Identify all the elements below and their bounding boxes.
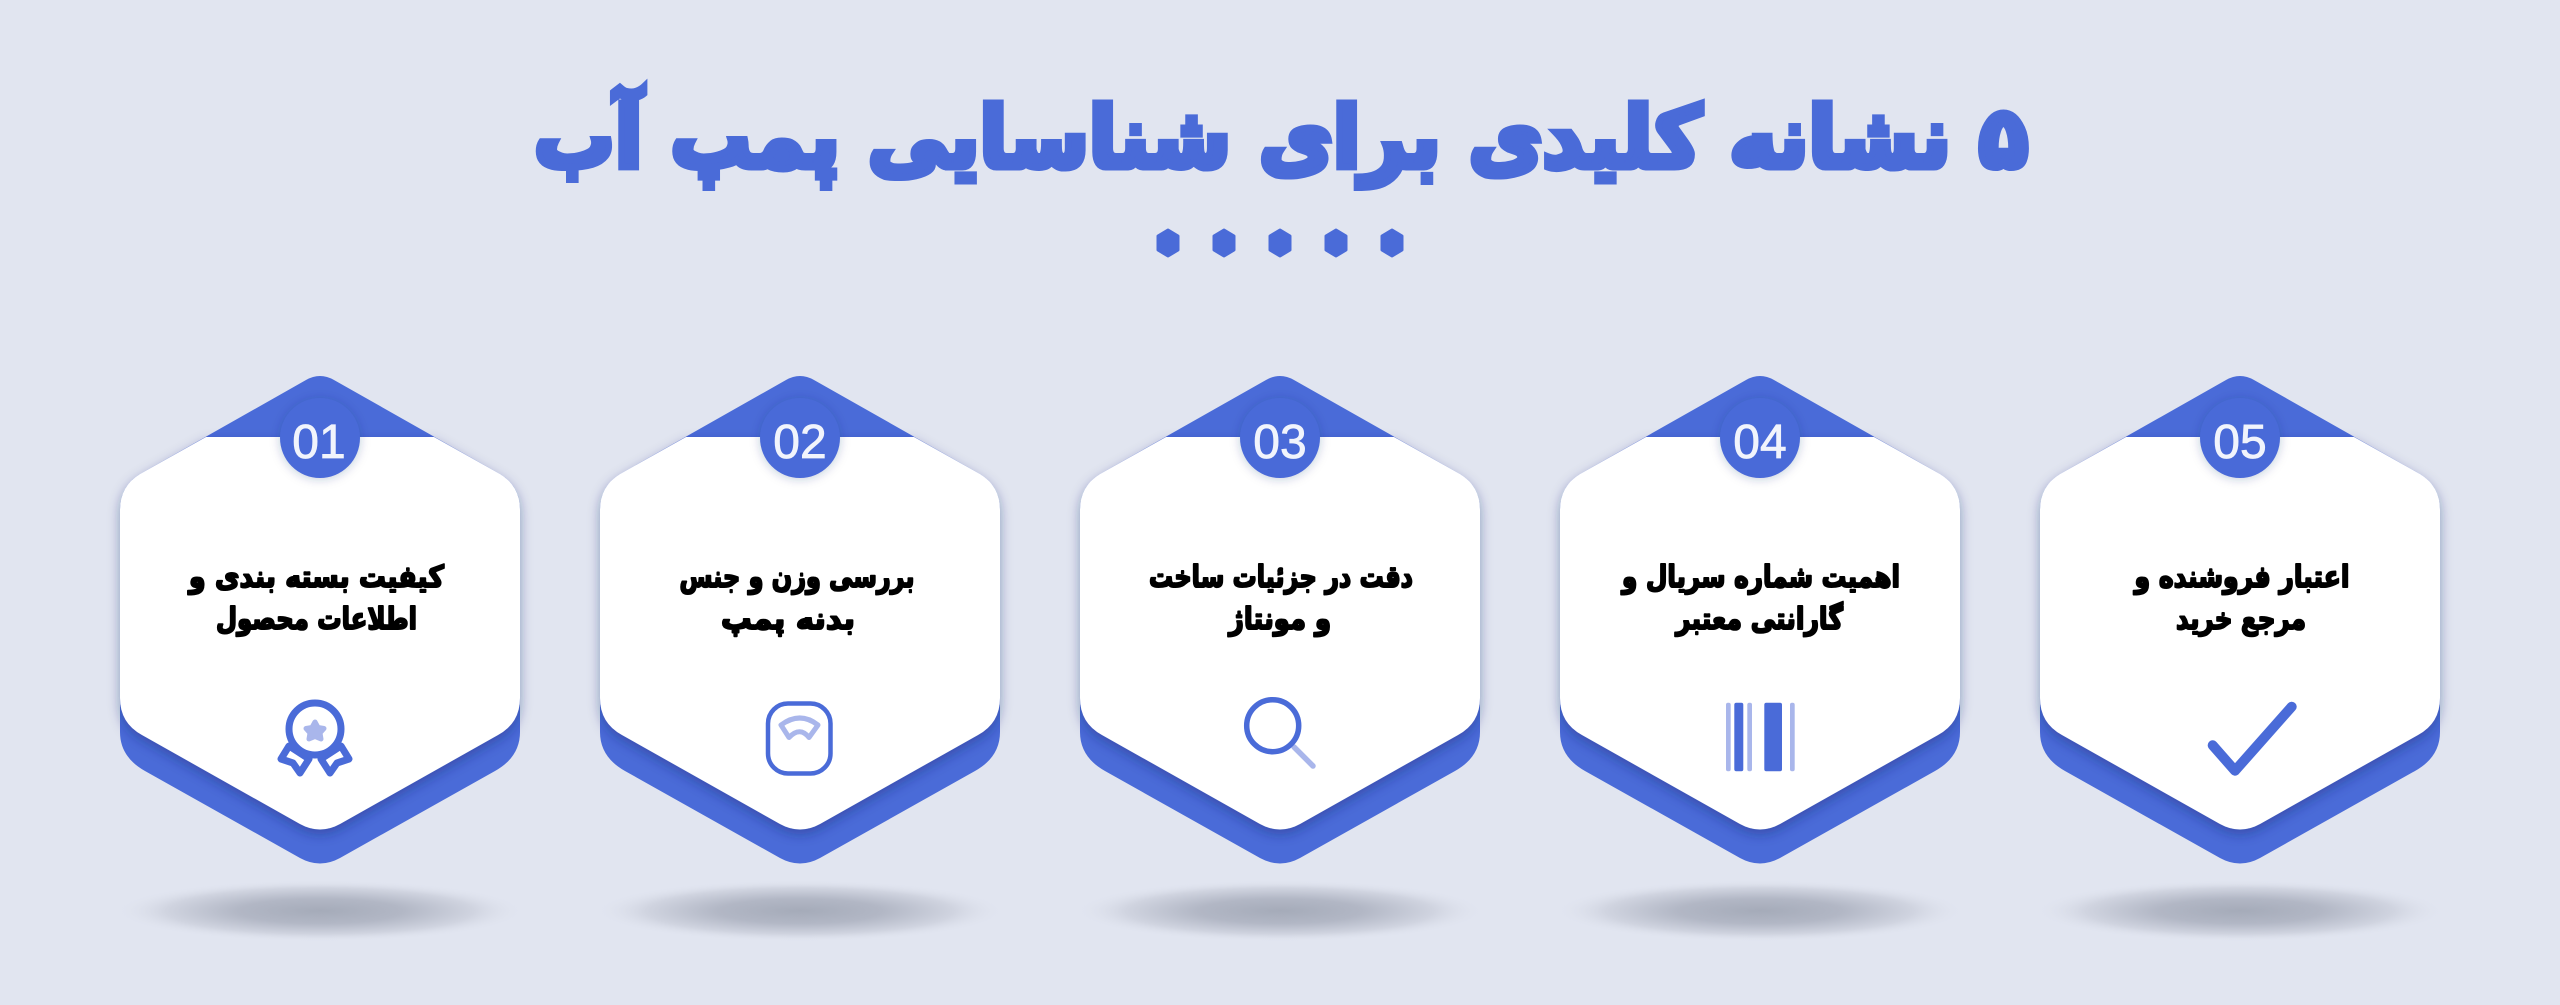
text card 02: [680, 560, 914, 637]
number 02: 02: [773, 416, 827, 469]
text card 05: [2133, 560, 2350, 637]
card 02: [595, 376, 1005, 942]
text card 03: و مونتاژ: [1227, 602, 1331, 637]
text card 02: بررسی وزن و جنس: [680, 560, 914, 595]
card 05: [2035, 376, 2445, 942]
title: ۵ نشانه کلیدی برای شناسایی پمپ آب: [534, 86, 2028, 188]
icon: barcode: [1726, 703, 1795, 771]
text card 03: دقت در جزئیات ساخت: [1149, 560, 1413, 595]
text card 05: اعتبار فروشنده و: [2133, 560, 2350, 595]
text card 01: اطلاعات محصول: [216, 602, 417, 637]
card 03: [1075, 376, 1485, 942]
card 04: [1555, 376, 1965, 942]
number 03: 03: [1253, 416, 1307, 469]
icon: medal: [281, 703, 349, 773]
text card 05: مرجع خرید: [2176, 602, 2306, 637]
number 04: 04: [1733, 416, 1787, 469]
text card 04: گارانتی معتبر: [1674, 601, 1843, 637]
icon: check mark: [2213, 707, 2292, 771]
text card 04: اهمیت شماره سریال و: [1620, 560, 1900, 595]
text card 03: [1149, 560, 1413, 637]
text card 01: کیفیت بسته بندی و: [187, 560, 444, 595]
card 01: [115, 376, 525, 942]
number 05: 05: [2213, 416, 2267, 469]
icon: magnifier: [1247, 700, 1313, 766]
text card 01: [187, 560, 444, 637]
text card 02: بدنه پمپ: [721, 602, 855, 637]
text card 04: [1620, 560, 1900, 637]
icon: scale: [768, 704, 830, 774]
title dots: [1158, 230, 1402, 256]
number 01: 01: [292, 416, 346, 469]
